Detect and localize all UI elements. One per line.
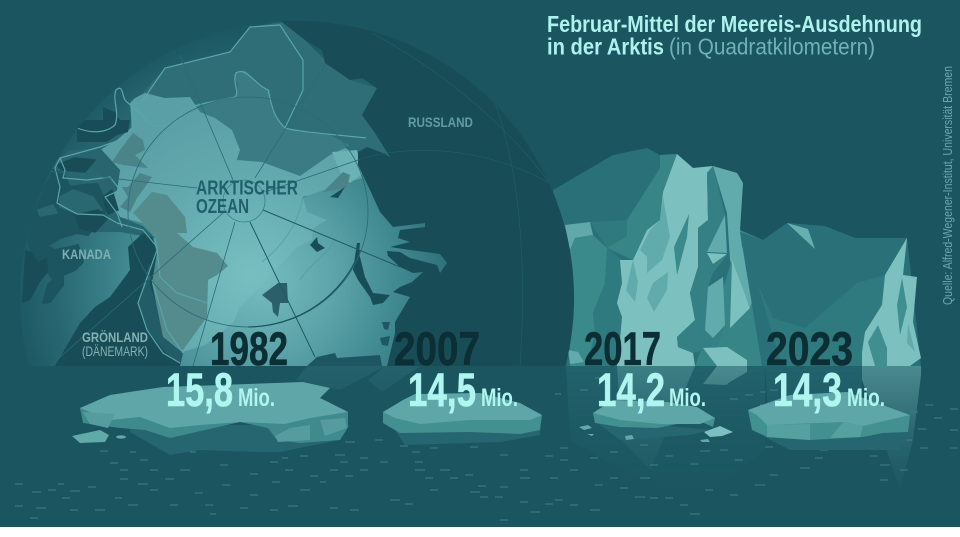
Russia mainland [280,0,575,366]
label Arktischer Ozean [196,178,298,218]
label Grönland: GRÖNLAND [82,329,148,345]
graticule [40,33,575,366]
title [547,11,922,60]
label Kanada: KANADA [62,246,111,262]
year: 2007 [394,322,480,375]
Arctic islands grey [112,133,152,212]
floe reflection [600,420,712,440]
Greenland [133,192,228,350]
iceberg left [553,148,782,366]
floe reflection [765,430,912,450]
ice floe 2023 [748,392,912,450]
data 2023 [766,322,885,416]
reflected right iceberg [765,366,862,402]
data 2007 [394,322,518,416]
map globe of the Arctic [20,0,575,366]
Canadian island channels [38,182,102,217]
data 1982 [166,322,288,416]
map labels [62,114,473,359]
islands near the pole [323,172,350,192]
floe top [593,400,715,424]
Svalbard [262,283,288,317]
floe top [748,392,910,426]
value: 14,2 [597,363,665,416]
sea ice [100,93,362,352]
reflected left iceberg [566,366,765,402]
year: 2017 [584,322,661,375]
reflected coast [296,366,420,392]
sea surface ripples [15,378,958,520]
unit: Mio. [481,384,518,412]
unit: Mio. [238,384,275,412]
data 2017 [584,322,706,416]
label Arktischer Ozean: OZEAN [196,196,249,218]
floe facet [767,422,863,440]
label Russland: RUSSLAND [408,114,473,130]
floe body [748,410,910,440]
label Arktischer Ozean: ARKTISCHER [196,178,298,200]
Russian coast bottom [307,353,382,366]
reflected right peak [862,366,921,466]
ice floe 2017 [579,400,733,442]
darker Canadian patches [57,158,118,232]
floe facets [83,412,347,442]
Canadian islands west [22,250,48,303]
reflected ice column [617,366,695,440]
title: in der Arktis [547,34,664,60]
year: 1982 [210,322,288,375]
floe body [383,412,542,434]
small floe [72,430,109,443]
Novaya Zemlya [353,243,390,305]
Greenland inner band [138,262,183,364]
inner sea ice zone [195,70,350,176]
year: 2023 [766,322,853,375]
tiny floe [116,435,126,439]
floe body [80,398,348,443]
horizon water [0,366,960,527]
floe body [593,413,715,428]
small floe [704,426,733,437]
ice floe 1982 [72,382,350,455]
tiny floes [579,425,710,442]
globe base [30,48,569,366]
value: 15,8 [166,363,233,416]
floe top [80,382,348,428]
reflected ice block [703,366,747,385]
source: Quelle: Alfred-Wegener-Institut, Universität Bremen [941,66,955,305]
Canadian mid land [40,148,155,238]
floe reflection [130,425,350,455]
iceberg right [740,223,921,366]
floe top [383,393,542,424]
Canadian islands dark [28,170,108,303]
value: 14,3 [773,363,842,416]
water reflections [296,366,921,466]
unit: Mio. [669,384,706,412]
Severnaya island dark [310,187,345,252]
value: 14,5 [408,363,476,416]
open sea region [142,22,386,198]
floe reflection [395,422,540,445]
Canadian islands top [77,107,130,142]
dark land around Greenland [55,233,183,366]
light ice rim [332,150,363,183]
unit: Mio. [847,384,885,412]
title: (in Quadratkilometern) [669,34,875,60]
ice floe 2007 [383,393,542,445]
ice extent outlines [55,25,366,363]
small islets [380,322,390,346]
label Dänemark: (DÄNEMARK) [82,343,148,359]
